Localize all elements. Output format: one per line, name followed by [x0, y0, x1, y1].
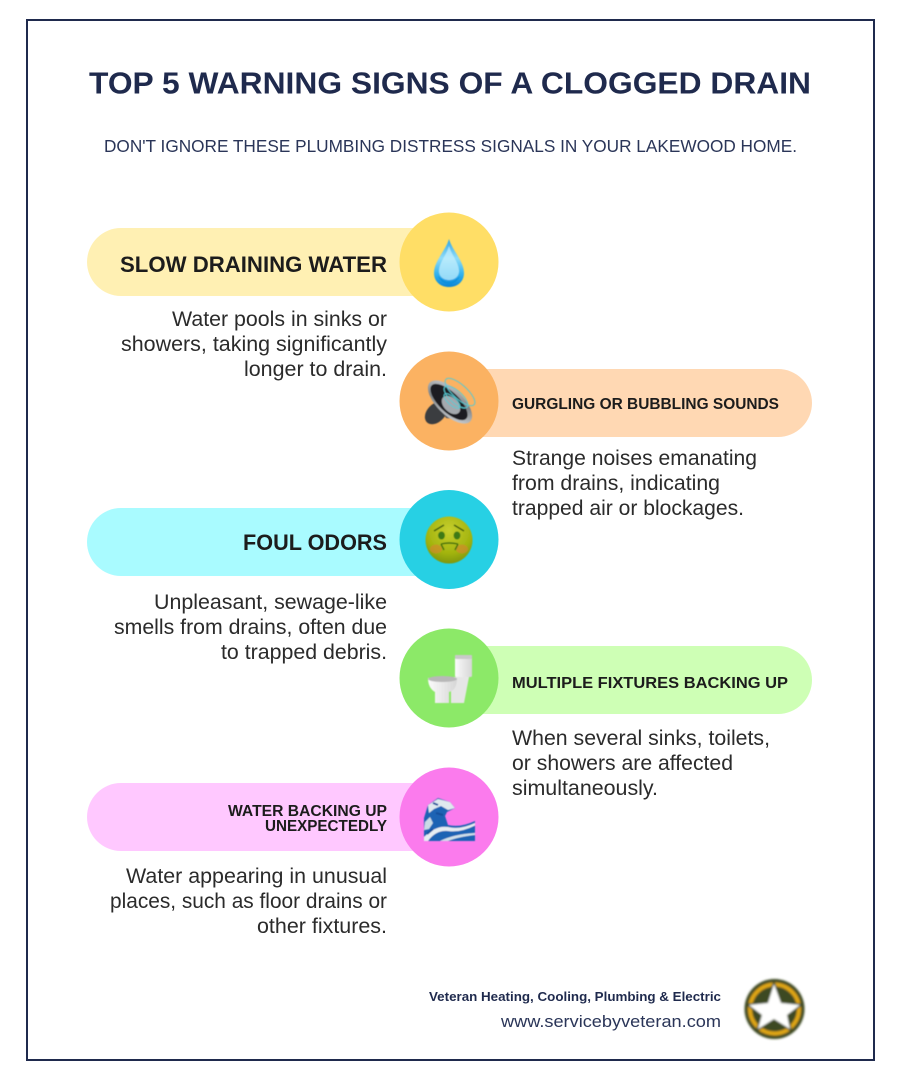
- description: foul odors: Unpleasant, sewage-like: [154, 591, 387, 614]
- heading: multiple fixtures: MULTIPLE FIXTURES BACKING UP: [512, 675, 788, 692]
- heading: foul odors: FOUL ODORS: [243, 530, 387, 555]
- description: multiple fixtures: [512, 727, 770, 800]
- description: multiple fixtures: When several sinks, toilets,: [512, 727, 770, 750]
- description: gurgling: trapped air or blockages.: [512, 497, 744, 520]
- description: slow draining water: longer to drain.: [244, 358, 387, 381]
- heading: gurgling: GURGLING OR BUBBLING SOUNDS: [512, 396, 779, 413]
- pill: foul odors: [87, 508, 449, 576]
- pill: multiple fixtures: [449, 646, 812, 714]
- description: slow draining water: [121, 308, 387, 381]
- circle: orange: [400, 352, 498, 450]
- icon: water drop: [434, 239, 464, 287]
- panel: multiple fixtures backing up: [400, 628, 812, 800]
- panel: water backing up unexpectedly: [87, 768, 498, 938]
- description: water backing up: places, such as floor drains or: [110, 890, 387, 913]
- description: multiple fixtures: simultaneously.: [512, 777, 658, 800]
- panel: slow draining water: [87, 212, 499, 381]
- description: gurgling: [512, 447, 757, 520]
- icon: toilet: [428, 655, 472, 703]
- description: slow draining water: showers, taking significantly: [121, 333, 387, 356]
- pill: slow draining water: [87, 228, 449, 296]
- circle: cyan: [400, 490, 498, 589]
- circle: yellow: [400, 212, 498, 312]
- circle: pink: [400, 768, 498, 866]
- icon: great wave: [424, 798, 475, 841]
- description: water backing up: [110, 865, 387, 938]
- description: water backing up: Water appearing in unusual: [126, 865, 387, 888]
- pill: gurgling: [449, 369, 812, 437]
- description: gurgling: Strange noises emanating: [512, 447, 757, 470]
- icon: nauseated face: [426, 516, 472, 564]
- subtitle: DON'T IGNORE THESE PLUMBING DISTRESS SIGNALS IN YOUR LAKEWOOD HOME.: [104, 136, 797, 156]
- description: multiple fixtures: or showers are affected: [512, 752, 733, 775]
- heading: slow draining water: SLOW DRAINING WATER: [120, 252, 387, 277]
- footer company name: Veteran Heating, Cooling, Plumbing & Electric: [429, 989, 721, 1004]
- description: gurgling: from drains, indicating: [512, 472, 720, 495]
- footer website: www.servicebyveteran.com: [500, 1013, 721, 1031]
- description: water backing up: other fixtures.: [257, 915, 387, 938]
- pill: water backing up: [87, 783, 449, 851]
- panel: gurgling or bubbling sounds: [400, 352, 812, 520]
- description: foul odors: [114, 591, 387, 664]
- description: slow draining water: Water pools in sinks or: [172, 308, 387, 331]
- icon: speaker: [420, 373, 479, 431]
- heading: water backing up: UNEXPECTEDLY: [265, 818, 388, 835]
- title: TOP 5 WARNING SIGNS OF A CLOGGED DRAIN: [89, 66, 811, 100]
- logo: star badge: [744, 979, 804, 1039]
- panel: foul odors: [87, 490, 498, 664]
- description: foul odors: to trapped debris.: [221, 641, 387, 664]
- heading: water backing up: WATER BACKING UP: [228, 803, 387, 820]
- heading: water backing up: [228, 803, 388, 835]
- description: foul odors: smells from drains, often due: [114, 616, 387, 639]
- circle: green: [400, 628, 498, 728]
